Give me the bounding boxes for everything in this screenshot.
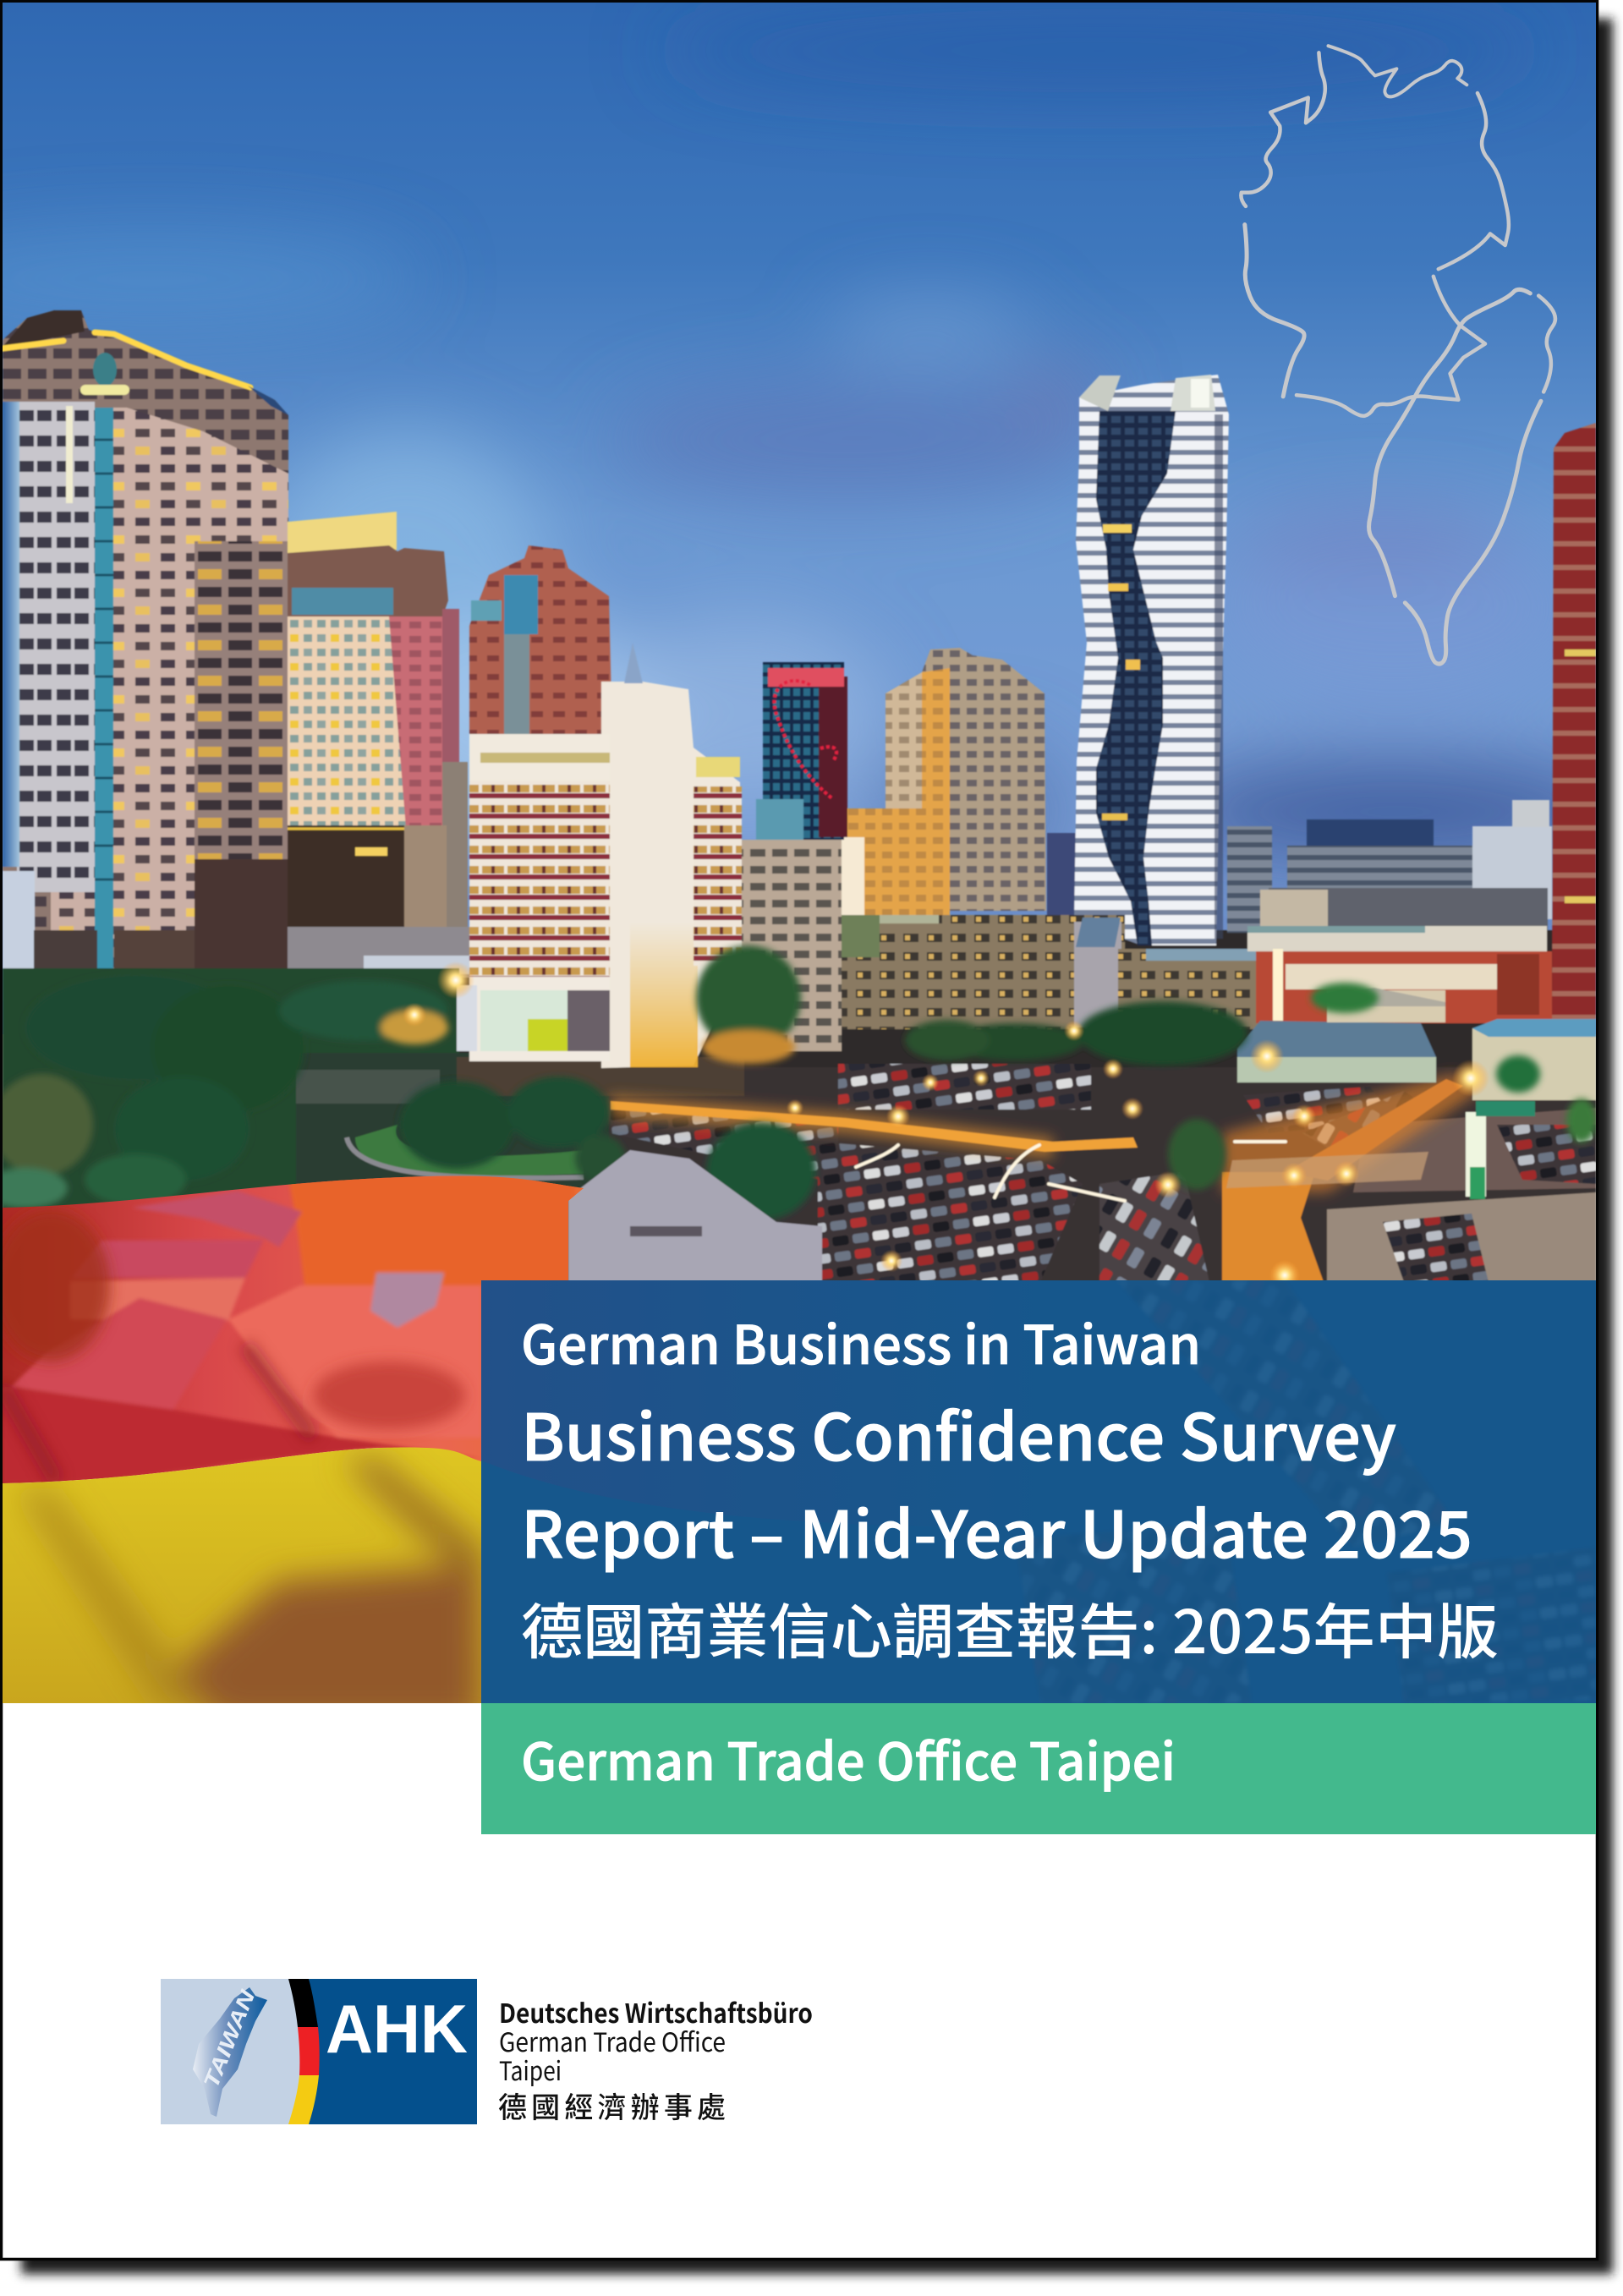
trees in the park and neighbourhood: [0, 945, 1597, 1220]
AHK logo: [161, 1979, 477, 2124]
distant buildings on the right: [1047, 800, 1552, 933]
ghosted parking cars: [1015, 1280, 1596, 1703]
subtitle: German Business in Taiwan: German Business in Taiwan: [521, 1303, 1201, 1380]
cover photograph: city skyline at dusk: [0, 3, 1623, 1290]
logo: light blue field: [161, 1979, 304, 2124]
logo: curved German flag stripe: [288, 1979, 320, 2124]
tower: dark glass building with red LED heart: [756, 662, 847, 840]
green band: German Trade Office Taipei: German Trade Office Taipei: [521, 1720, 1176, 1795]
parking lots and streets: [609, 1064, 1596, 1285]
tower: white hotel with balcony rows: [457, 643, 742, 1068]
glowing main road: [611, 1101, 1138, 1152]
office name: Chinese: 德國經濟辦事處: [498, 2085, 726, 2126]
title line 2: Report – Mid-Year Update 2025: [521, 1483, 1472, 1576]
ghosted flag curve inside panel: [481, 1280, 1057, 1527]
tower: red building on right edge: [1552, 423, 1596, 1020]
logo: AHK letters: AHK: [326, 1992, 468, 2068]
evening sky: [0, 3, 1623, 1034]
office name: city: Taipei: [499, 2050, 562, 2088]
title line 1: Business Confidence Survey: [521, 1386, 1396, 1479]
glow under the main road: [611, 1074, 1480, 1192]
office name: English: German Trade Office: [499, 2021, 726, 2059]
logo: TAIWAN label: TAIWAN: [200, 1986, 260, 2091]
tower: left curved hotel tower: [3, 310, 288, 989]
German flag: red band over the photo: [0, 1175, 584, 1483]
tower: red-brown building behind the hotel: [469, 545, 612, 736]
tower: beige apartment block with orange glow: [842, 648, 1046, 915]
office name block: [498, 1992, 813, 2126]
low-rise neighbourhood: [842, 915, 1552, 1029]
ground base behind buildings, streets and parking: [458, 929, 1553, 1280]
green band: German Trade Office Taipei: [481, 1703, 1596, 1834]
logo: dark blue field: [309, 1979, 477, 2124]
office name: German: Deutsches Wirtschaftsbüro: [499, 1992, 813, 2030]
tower: twisted white high-rise: [1074, 375, 1229, 945]
front buildings beside the lot: [1237, 988, 1596, 1116]
skyline, softened for a photographic look: [0, 310, 1597, 1290]
Germany and Taiwan outline drawing in sky: [1241, 46, 1555, 664]
title panel: translucent blue over photo: [481, 1280, 1596, 1703]
Chinese title: 德國商業信心調查報告: 2025年中版: [521, 1585, 1499, 1671]
tower: centre-left office block with lit sign: [288, 512, 469, 978]
street lights and sparkle glows: [403, 962, 1489, 1290]
German flag: yellow band with silk folds: [3, 1438, 481, 1725]
tower: beige mid-rise beside the hotel: [742, 840, 842, 1051]
park lawn and plaza: [3, 968, 744, 1209]
pale roof of low building at edge of flag: [568, 1150, 822, 1282]
logo: Taiwan island icon: [193, 1987, 267, 2117]
